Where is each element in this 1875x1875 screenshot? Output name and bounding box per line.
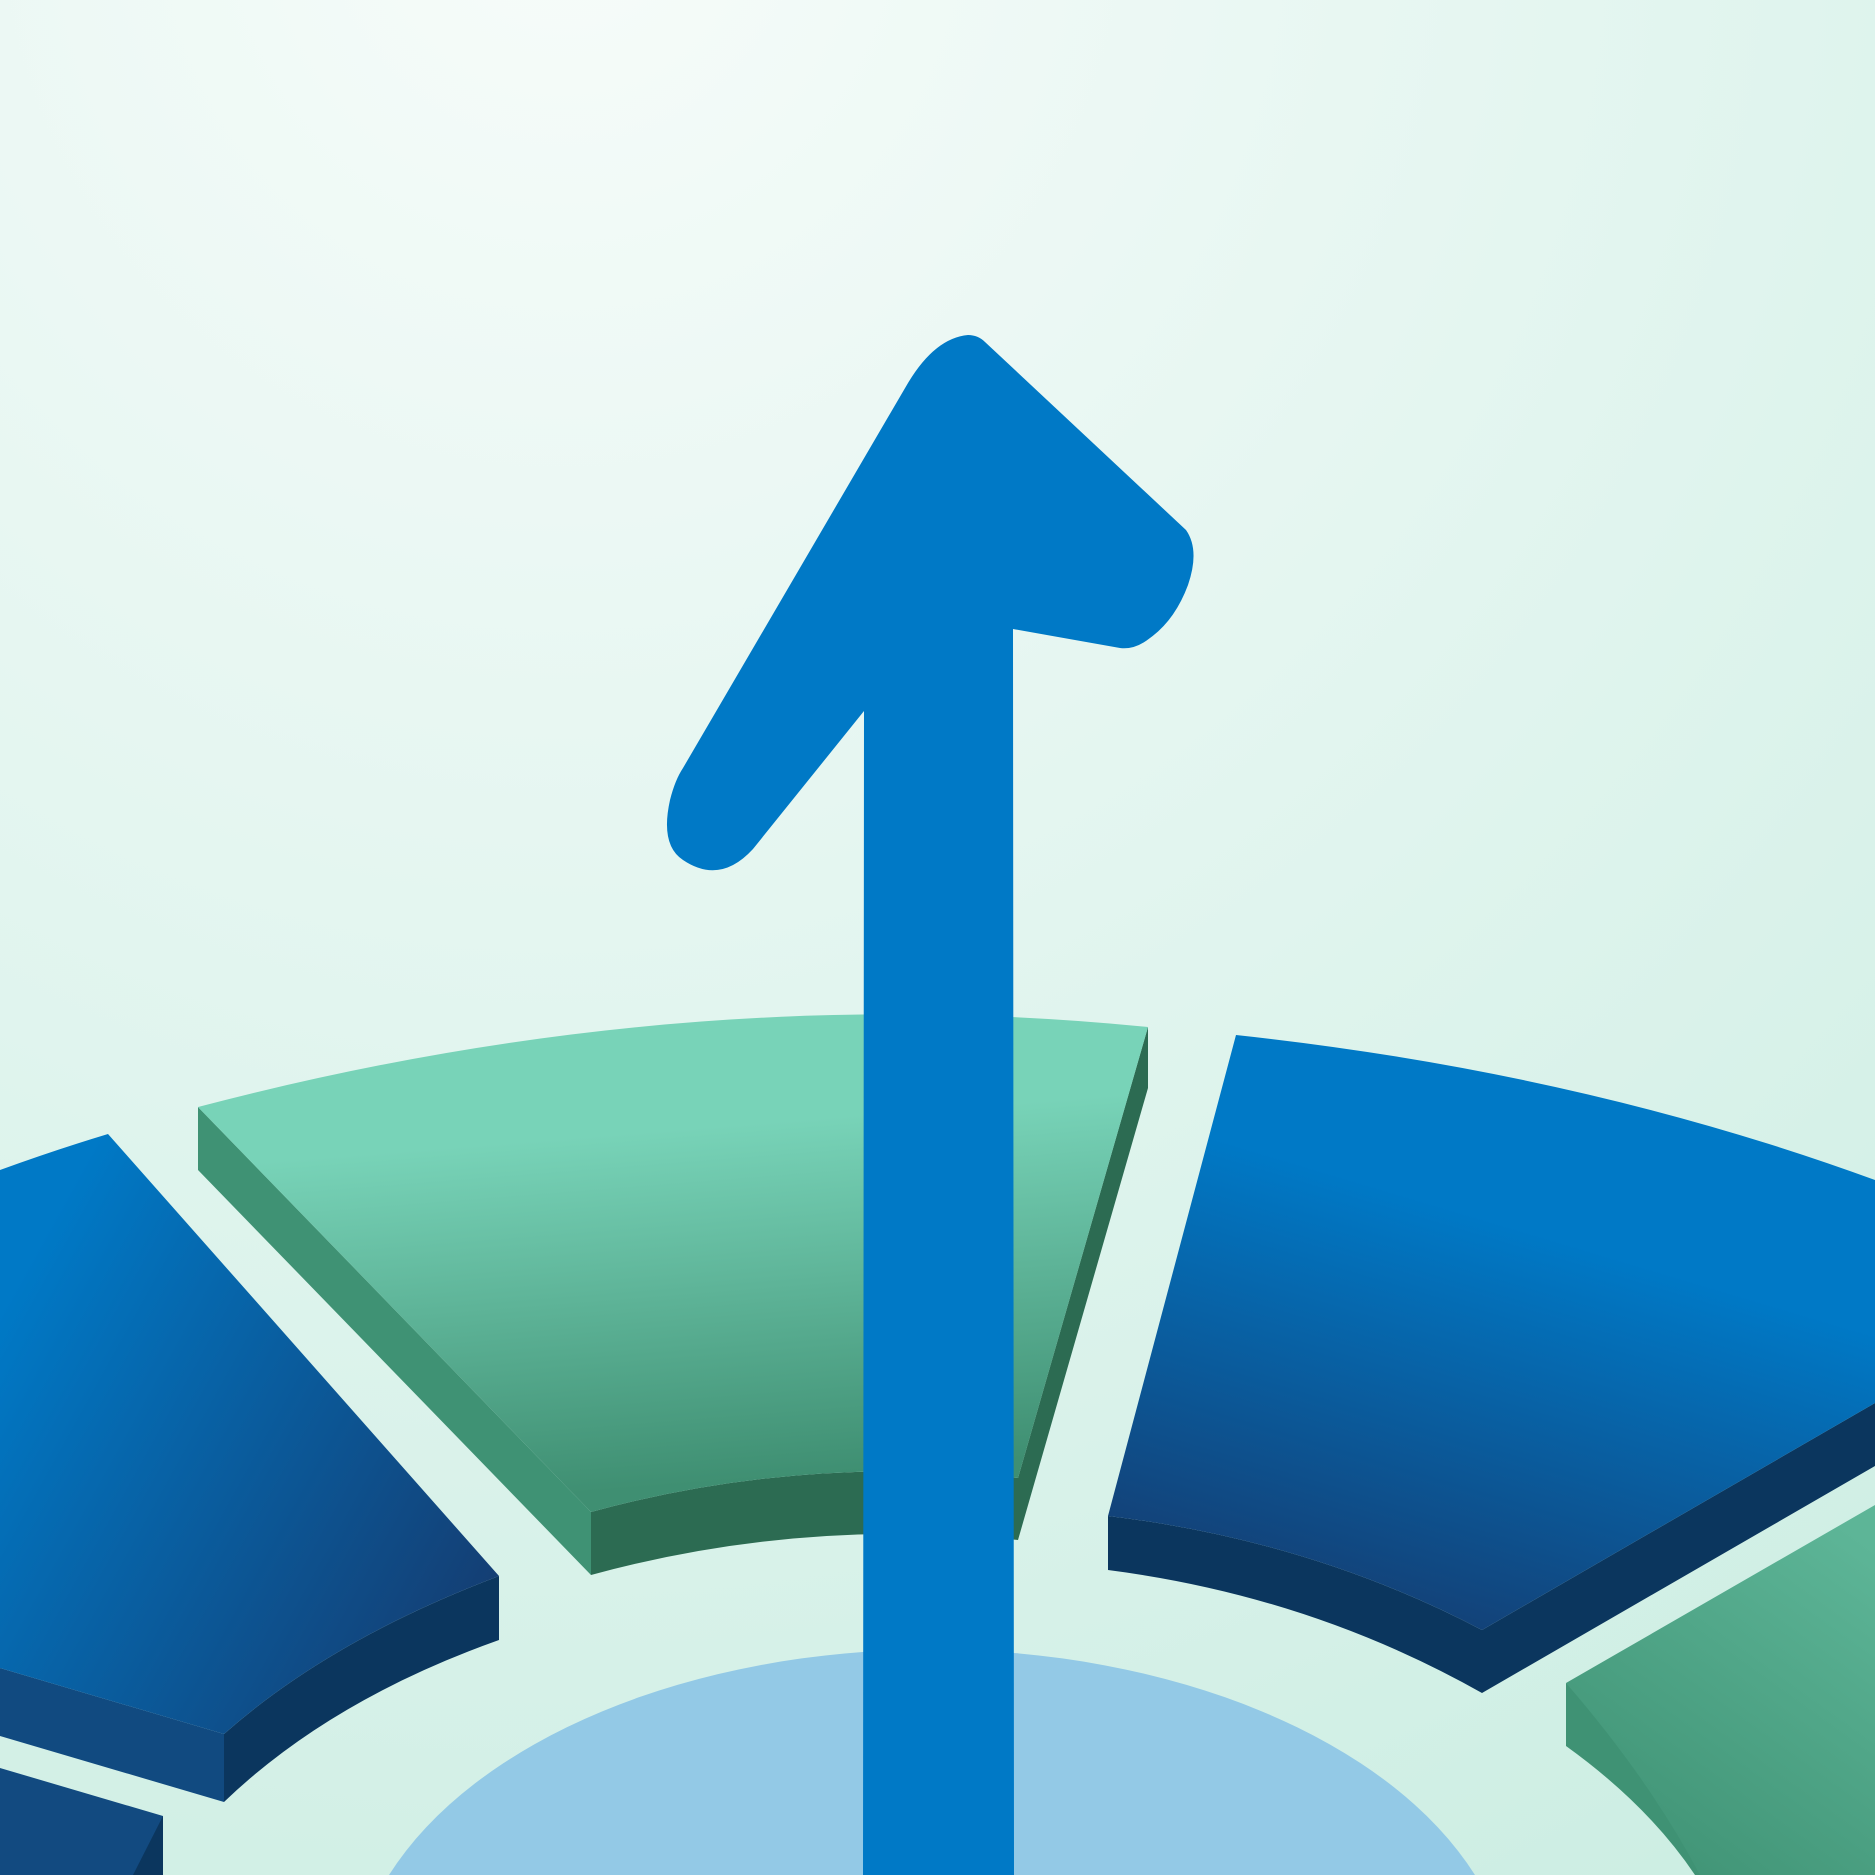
segment: green bottom right — [1566, 1505, 1875, 1875]
segment: blue bottom-left — [0, 1768, 163, 1875]
segment: blue right — [1108, 1035, 1875, 1693]
segment: blue left — [0, 1134, 499, 1802]
center ellipse: light blue — [389, 1649, 1475, 1875]
segment: green top center — [198, 1014, 1148, 1575]
arrow: blue upward — [667, 335, 1194, 1875]
